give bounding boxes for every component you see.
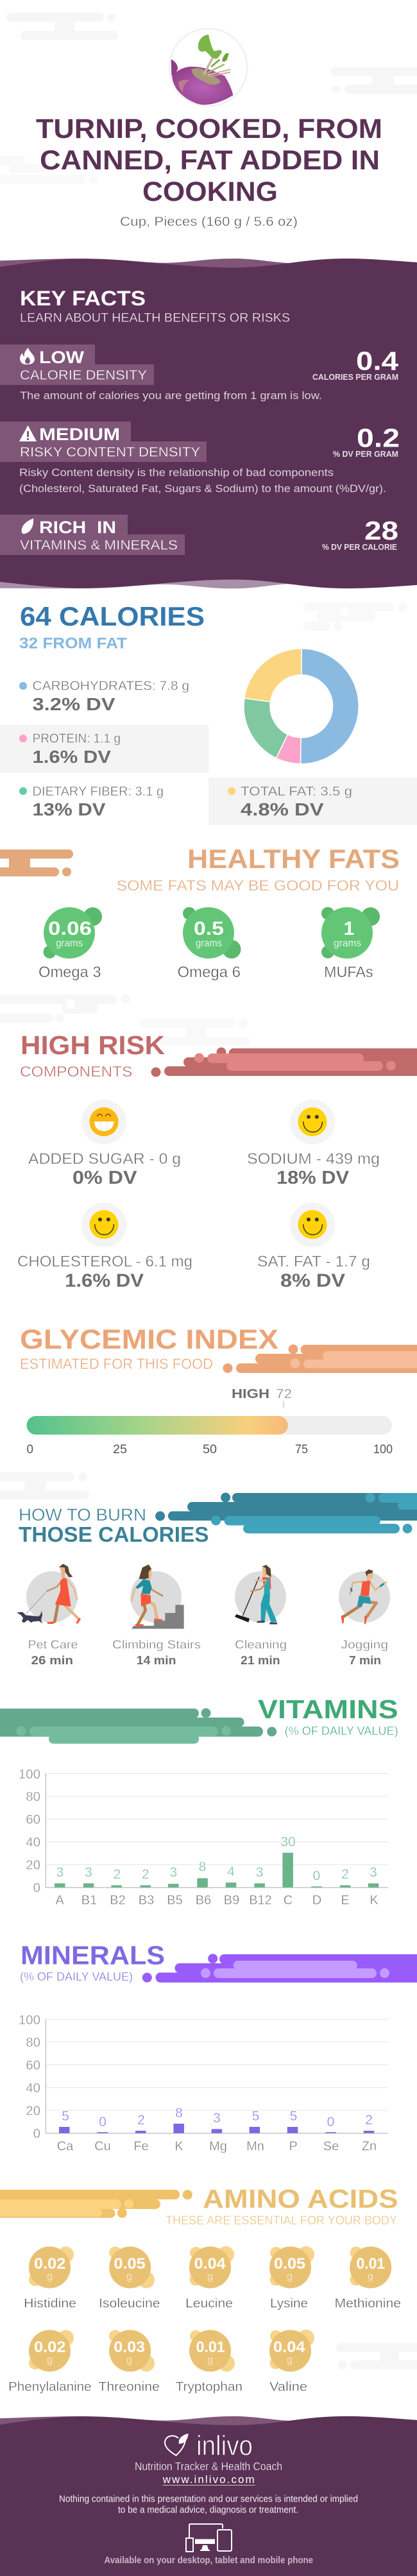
- amino: threonine: 0.03: [114, 2339, 145, 2356]
- badge: mufas: grams: [334, 938, 361, 949]
- item: added sugar: ADDED SUGAR - 0 g: [28, 1150, 181, 1168]
- activity: jogging: 7 min: [349, 1654, 381, 1667]
- bar chart: minerals: 0: [33, 2126, 40, 2141]
- disclaimer: to be a medical advice, diagnosis or treatment.: [118, 2505, 298, 2516]
- item: saturated fat: 8% DV: [280, 1270, 346, 1291]
- gauge bar: 100: [373, 1443, 393, 1456]
- icon: flame: [20, 348, 35, 364]
- amino: isoleucine: g: [126, 2271, 132, 2282]
- amino: lysine: [269, 2246, 314, 2311]
- section: glycemic index: 72: [276, 1387, 292, 1401]
- bar chart: vitamins: 0: [33, 1881, 40, 1895]
- amino: histidine: [24, 2247, 76, 2311]
- amino: threonine: [98, 2330, 160, 2394]
- heading: amino acids: AMINO ACIDS: [203, 2184, 398, 2213]
- macro: carbohydrates: 3.2% DV: [32, 694, 115, 714]
- fact: low calorie density: CALORIES PER GRAM: [312, 372, 398, 382]
- subheading: amino acids: THESE ARE ESSENTIAL FOR YOUR BODY: [166, 2214, 397, 2228]
- macro: total fat: [208, 778, 417, 825]
- item: added sugar: [28, 1100, 181, 1188]
- fact: medium risky content density: MEDIUM: [39, 425, 120, 444]
- decorative streak: high risk: [151, 1047, 417, 1077]
- section: vitamins: [0, 1694, 398, 1907]
- amino: histidine: Histidine: [24, 2297, 76, 2311]
- donut chart: [244, 649, 359, 764]
- item: sodium: 18% DV: [277, 1168, 350, 1188]
- bar chart: vitamins: B3: [139, 1893, 154, 1907]
- item: saturated fat: [257, 1202, 370, 1291]
- subheading: glycemic index: ESTIMATED FOR THIS FOOD: [20, 1355, 213, 1372]
- bar chart: minerals: Cu: [94, 2140, 111, 2154]
- fact: medium risky content density: (Cholesterol, Saturated Fat, Sugars & Sodium) to the amount (%DV/gr).: [19, 483, 386, 495]
- amino: valine: 0.04: [273, 2339, 305, 2356]
- subheading: from fat: 32 FROM FAT: [19, 635, 127, 653]
- amino: methionine: 0.01: [357, 2255, 385, 2273]
- decorative streak: minerals: [142, 1954, 417, 1983]
- gauge bar: 25: [113, 1443, 127, 1456]
- subheading: minerals: (% OF DAILY VALUE): [20, 1970, 133, 1983]
- macro: total fat: TOTAL FAT: 3.5 g: [241, 785, 352, 799]
- label: pet care: Pet Care: [28, 1638, 78, 1651]
- badge: omega 3: [38, 907, 102, 981]
- macro: carbohydrates: [19, 679, 189, 714]
- amino: tryptophan: Tryptophan: [176, 2380, 243, 2394]
- title: [36, 114, 382, 207]
- amino: phenylalanine: 0.02: [34, 2339, 65, 2356]
- bar chart: vitamins: D: [312, 1893, 321, 1907]
- bar chart: minerals: 20: [26, 2103, 40, 2119]
- label: climbing stairs: Climbing Stairs: [112, 1638, 201, 1651]
- title: COOKING: [142, 176, 278, 207]
- gauge bar: 0: [27, 1443, 33, 1456]
- section: glycemic index: [20, 1324, 417, 1456]
- serving size: Cup, Pieces (160 g / 5.6 oz): [120, 215, 298, 229]
- bar chart: vitamins: 80: [26, 1789, 40, 1804]
- activity: cleaning: [235, 1565, 287, 1667]
- fact: low calorie density: CALORIE DENSITY: [20, 368, 147, 383]
- bar chart: minerals: Ca: [57, 2140, 74, 2154]
- section: minerals: [19, 1941, 417, 2154]
- amino: isoleucine: Isoleucine: [99, 2297, 160, 2311]
- bar chart: minerals: K: [174, 2140, 183, 2154]
- bar chart: vitamins: 0: [313, 1869, 320, 1884]
- badge: omega 3: 0.06: [48, 918, 92, 939]
- subheading: healthy fats: SOME FATS MAY BE GOOD FOR YOU: [117, 877, 399, 894]
- bar chart: vitamins: B12: [249, 1893, 272, 1907]
- heading: calories: 64 CALORIES: [20, 601, 205, 631]
- item: cholesterol: [17, 1202, 192, 1291]
- amino: phenylalanine: g: [47, 2355, 53, 2366]
- food image: turnip in ring: [169, 28, 247, 107]
- section: high risk components: [17, 1030, 417, 1291]
- bar chart: vitamins: 3: [56, 1865, 64, 1880]
- bar chart: vitamins: 100: [19, 1767, 40, 1782]
- heading: vitamins: VITAMINS: [258, 1694, 398, 1724]
- macro: protein: 1.6% DV: [32, 747, 111, 767]
- bar chart: vitamins: 3: [256, 1865, 263, 1880]
- website link: www.inlivo.com: [162, 2473, 255, 2486]
- disclaimer: [59, 2494, 358, 2516]
- bar chart: vitamins: K: [370, 1893, 379, 1907]
- title: CANNED, FAT ADDED IN: [40, 145, 380, 176]
- bar chart: minerals: 2: [137, 2113, 145, 2128]
- amino: valine: [269, 2330, 314, 2394]
- heading: minerals: MINERALS: [21, 1941, 165, 1970]
- activity: jogging: [339, 1569, 390, 1667]
- badge: mufas: MUFAs: [324, 964, 373, 981]
- amino: leucine: Leucine: [185, 2297, 233, 2311]
- bar chart: vitamins: B5: [167, 1893, 183, 1907]
- activity: cleaning: 21 min: [241, 1654, 280, 1667]
- bar chart: minerals: 0: [99, 2115, 106, 2129]
- panel: key facts: [0, 259, 417, 588]
- bar chart: vitamins: 2: [114, 1867, 121, 1882]
- macro: dietary fiber: [19, 785, 164, 819]
- bar chart: vitamins: B1: [81, 1893, 97, 1907]
- heading: how to burn: HOW TO BURN: [19, 1505, 146, 1524]
- decorative streak: burn: [155, 1492, 417, 1533]
- item: sodium: SODIUM - 439 mg: [247, 1150, 380, 1168]
- item: saturated fat: SAT. FAT - 1.7 g: [257, 1253, 370, 1270]
- amino: lysine: Lysine: [270, 2297, 308, 2311]
- badge: omega 3: grams: [56, 938, 83, 949]
- amino: methionine: g: [368, 2271, 373, 2282]
- amino: isoleucine: [99, 2247, 160, 2311]
- bar chart: minerals: 2: [365, 2113, 373, 2128]
- bar chart: minerals: 5: [290, 2109, 297, 2124]
- bar chart: vitamins: 3: [370, 1865, 377, 1880]
- amino: leucine: 0.04: [194, 2255, 226, 2273]
- bar chart: minerals: 5: [62, 2109, 69, 2124]
- amino: tryptophan: [176, 2330, 243, 2394]
- item: sodium: [247, 1100, 380, 1188]
- fact: low calorie density: LOW: [39, 348, 85, 367]
- decorative streak: healthy fats: [0, 849, 73, 876]
- bar chart: minerals: Fe: [133, 2140, 149, 2154]
- heading: healthy fats: HEALTHY FATS: [187, 844, 400, 874]
- amino: leucine: g: [207, 2271, 213, 2282]
- amino: tryptophan: 0.01: [196, 2339, 225, 2356]
- heading: glycemic index: GLYCEMIC INDEX: [20, 1324, 278, 1355]
- fact: rich in vitamins and minerals: % DV PER CALORIE: [322, 542, 397, 552]
- bar chart: vitamins: 60: [26, 1812, 40, 1827]
- decorative streak: glycemic: [223, 1345, 417, 1373]
- heading: key facts: KEY FACTS: [20, 287, 146, 310]
- macro: total fat: 4.8% DV: [241, 799, 324, 819]
- bar chart: vitamins: E: [341, 1893, 350, 1907]
- fact: medium risky content density: [0, 422, 400, 495]
- label: jogging: Jogging: [341, 1638, 388, 1651]
- decorative streak: amino acids: [0, 2190, 192, 2218]
- fact: medium risky content density: 0.2: [357, 423, 400, 453]
- gauge bar: 75: [295, 1443, 308, 1456]
- title: TURNIP, COOKED, FROM: [36, 114, 382, 144]
- bar chart: vitamins: 8: [199, 1860, 206, 1875]
- icon: leaf: [22, 518, 33, 534]
- badge: omega 6: [177, 907, 241, 981]
- bar chart: minerals: 60: [26, 2058, 40, 2072]
- subheading: components: COMPONENTS: [20, 1063, 132, 1080]
- bar chart: minerals: P: [289, 2140, 298, 2154]
- macro: carbohydrates: CARBOHYDRATES: 7.8 g: [32, 679, 189, 694]
- badge: mufas: 1: [344, 918, 354, 939]
- bar chart: vitamins: 20: [26, 1858, 40, 1872]
- bar chart: minerals: 100: [19, 2013, 40, 2027]
- bar chart: vitamins: 3: [169, 1865, 177, 1880]
- bar chart: vitamins: 2: [341, 1867, 349, 1882]
- section: how to burn those calories: [17, 1492, 417, 1667]
- bar chart: vitamins: A: [55, 1893, 64, 1907]
- subheading: key facts: LEARN ABOUT HEALTH BENEFITS OR RISKS: [20, 311, 290, 325]
- bar chart: vitamins: 2: [142, 1867, 149, 1882]
- bar chart: minerals: 0: [327, 2115, 334, 2129]
- bar chart: minerals: 40: [26, 2081, 40, 2095]
- fact: rich in vitamins and minerals: [0, 515, 398, 555]
- bar chart: minerals: Zn: [362, 2140, 377, 2154]
- fact: medium risky content density: Risky Content density is the relationship of bad components: [19, 467, 334, 479]
- footer panel: [0, 2416, 417, 2576]
- amino: threonine: Threonine: [98, 2380, 160, 2394]
- activity: pet care: [17, 1564, 81, 1667]
- amino: valine: g: [287, 2355, 293, 2366]
- amino: leucine: [185, 2246, 234, 2311]
- bar chart: minerals: [19, 2013, 388, 2154]
- availability note: Available on your desktop, tablet and mobile phone: [104, 2555, 313, 2566]
- bar chart: vitamins: C: [284, 1893, 293, 1907]
- fact: low calorie density: 0.4: [356, 346, 398, 376]
- section: calories: [0, 601, 417, 825]
- bar chart: vitamins: B6: [196, 1893, 211, 1907]
- amino: lysine: 0.05: [274, 2255, 305, 2273]
- section: amino acids: [0, 2184, 401, 2394]
- macro: dietary fiber: 13% DV: [32, 799, 106, 819]
- bar chart: minerals: 3: [213, 2111, 221, 2126]
- item: cholesterol: 1.6% DV: [65, 1270, 144, 1291]
- gauge bar: [27, 1416, 393, 1456]
- amino: lysine: g: [287, 2271, 293, 2282]
- subheading: vitamins: (% OF DAILY VALUE): [285, 1724, 398, 1737]
- item: cholesterol: CHOLESTEROL - 6.1 mg: [17, 1253, 192, 1270]
- badge: omega 3: Omega 3: [38, 964, 101, 981]
- bar chart: vitamins: 40: [26, 1835, 40, 1850]
- amino: histidine: g: [47, 2271, 53, 2282]
- logo: inlivo: [165, 2430, 253, 2462]
- fact: rich in vitamins and minerals: VITAMINS & MINERALS: [20, 538, 178, 553]
- fact: rich in vitamins and minerals: RICH IN: [39, 518, 116, 537]
- decorative streak: vitamins: [0, 1708, 277, 1744]
- amino: histidine: 0.02: [34, 2255, 65, 2273]
- amino: phenylalanine: [8, 2330, 92, 2394]
- gauge bar: 50: [203, 1443, 217, 1456]
- fact: rich in vitamins and minerals: 28: [364, 516, 398, 545]
- fact: medium risky content density: RISKY CONTENT DENSITY: [20, 445, 200, 460]
- heading: those calories: THOSE CALORIES: [19, 1523, 209, 1546]
- macro: dietary fiber: DIETARY FIBER: 3.1 g: [32, 785, 164, 799]
- activity: pet care: 26 min: [31, 1654, 73, 1667]
- activity: climbing stairs: 14 min: [137, 1654, 176, 1667]
- badge: omega 6: grams: [196, 938, 222, 949]
- bar chart: minerals: Mg: [209, 2140, 227, 2154]
- heading: high risk: HIGH RISK: [21, 1030, 165, 1060]
- amino: phenylalanine: Phenylalanine: [8, 2380, 92, 2394]
- bar chart: vitamins: 4: [227, 1864, 235, 1879]
- amino: methionine: Methionine: [335, 2297, 401, 2311]
- amino: isoleucine: 0.05: [114, 2255, 146, 2273]
- logo: inlivo: inlivo: [196, 2430, 253, 2462]
- bar chart: vitamins: 3: [85, 1865, 92, 1880]
- fact: low calorie density: The amount of calories you are getting from 1 gram is low.: [20, 390, 322, 402]
- macro: protein: [0, 725, 209, 772]
- amino: threonine: g: [126, 2355, 132, 2366]
- bar chart: vitamins: B9: [224, 1893, 239, 1907]
- bar chart: minerals: Se: [323, 2140, 339, 2154]
- badge: mufas: [321, 907, 380, 981]
- bar chart: vitamins: [19, 1767, 388, 1907]
- label: cleaning: Cleaning: [235, 1638, 287, 1651]
- fact: low calorie density: [0, 345, 398, 402]
- badge: omega 6: Omega 6: [177, 964, 241, 981]
- fact: medium risky content density: % DV PER GRAM: [333, 449, 398, 459]
- tagline: Nutrition Tracker & Health Coach: [135, 2460, 282, 2473]
- icon: warning triangle: [19, 425, 37, 441]
- level label: HIGH: [232, 1387, 269, 1401]
- activity: climbing stairs: [112, 1564, 201, 1667]
- bar chart: vitamins: 30: [280, 1834, 296, 1849]
- macro: protein: PROTEIN: 1.1 g: [32, 732, 121, 746]
- section: healthy fats: [0, 844, 400, 981]
- bar chart: minerals: 5: [252, 2109, 259, 2124]
- amino: methionine: [335, 2247, 401, 2311]
- icon: devices: [186, 2524, 232, 2552]
- bar chart: minerals: Mn: [246, 2140, 264, 2154]
- item: added sugar: 0% DV: [72, 1168, 137, 1188]
- bar chart: minerals: 8: [175, 2106, 183, 2120]
- amino: valine: Valine: [269, 2380, 307, 2394]
- disclaimer: Nothing contained in this presentation and our services is intended or implied: [59, 2494, 358, 2504]
- badge: omega 6: 0.5: [194, 918, 224, 939]
- bar chart: vitamins: B2: [110, 1893, 126, 1907]
- bar chart: minerals: 80: [26, 2035, 40, 2050]
- amino: tryptophan: g: [207, 2355, 213, 2366]
